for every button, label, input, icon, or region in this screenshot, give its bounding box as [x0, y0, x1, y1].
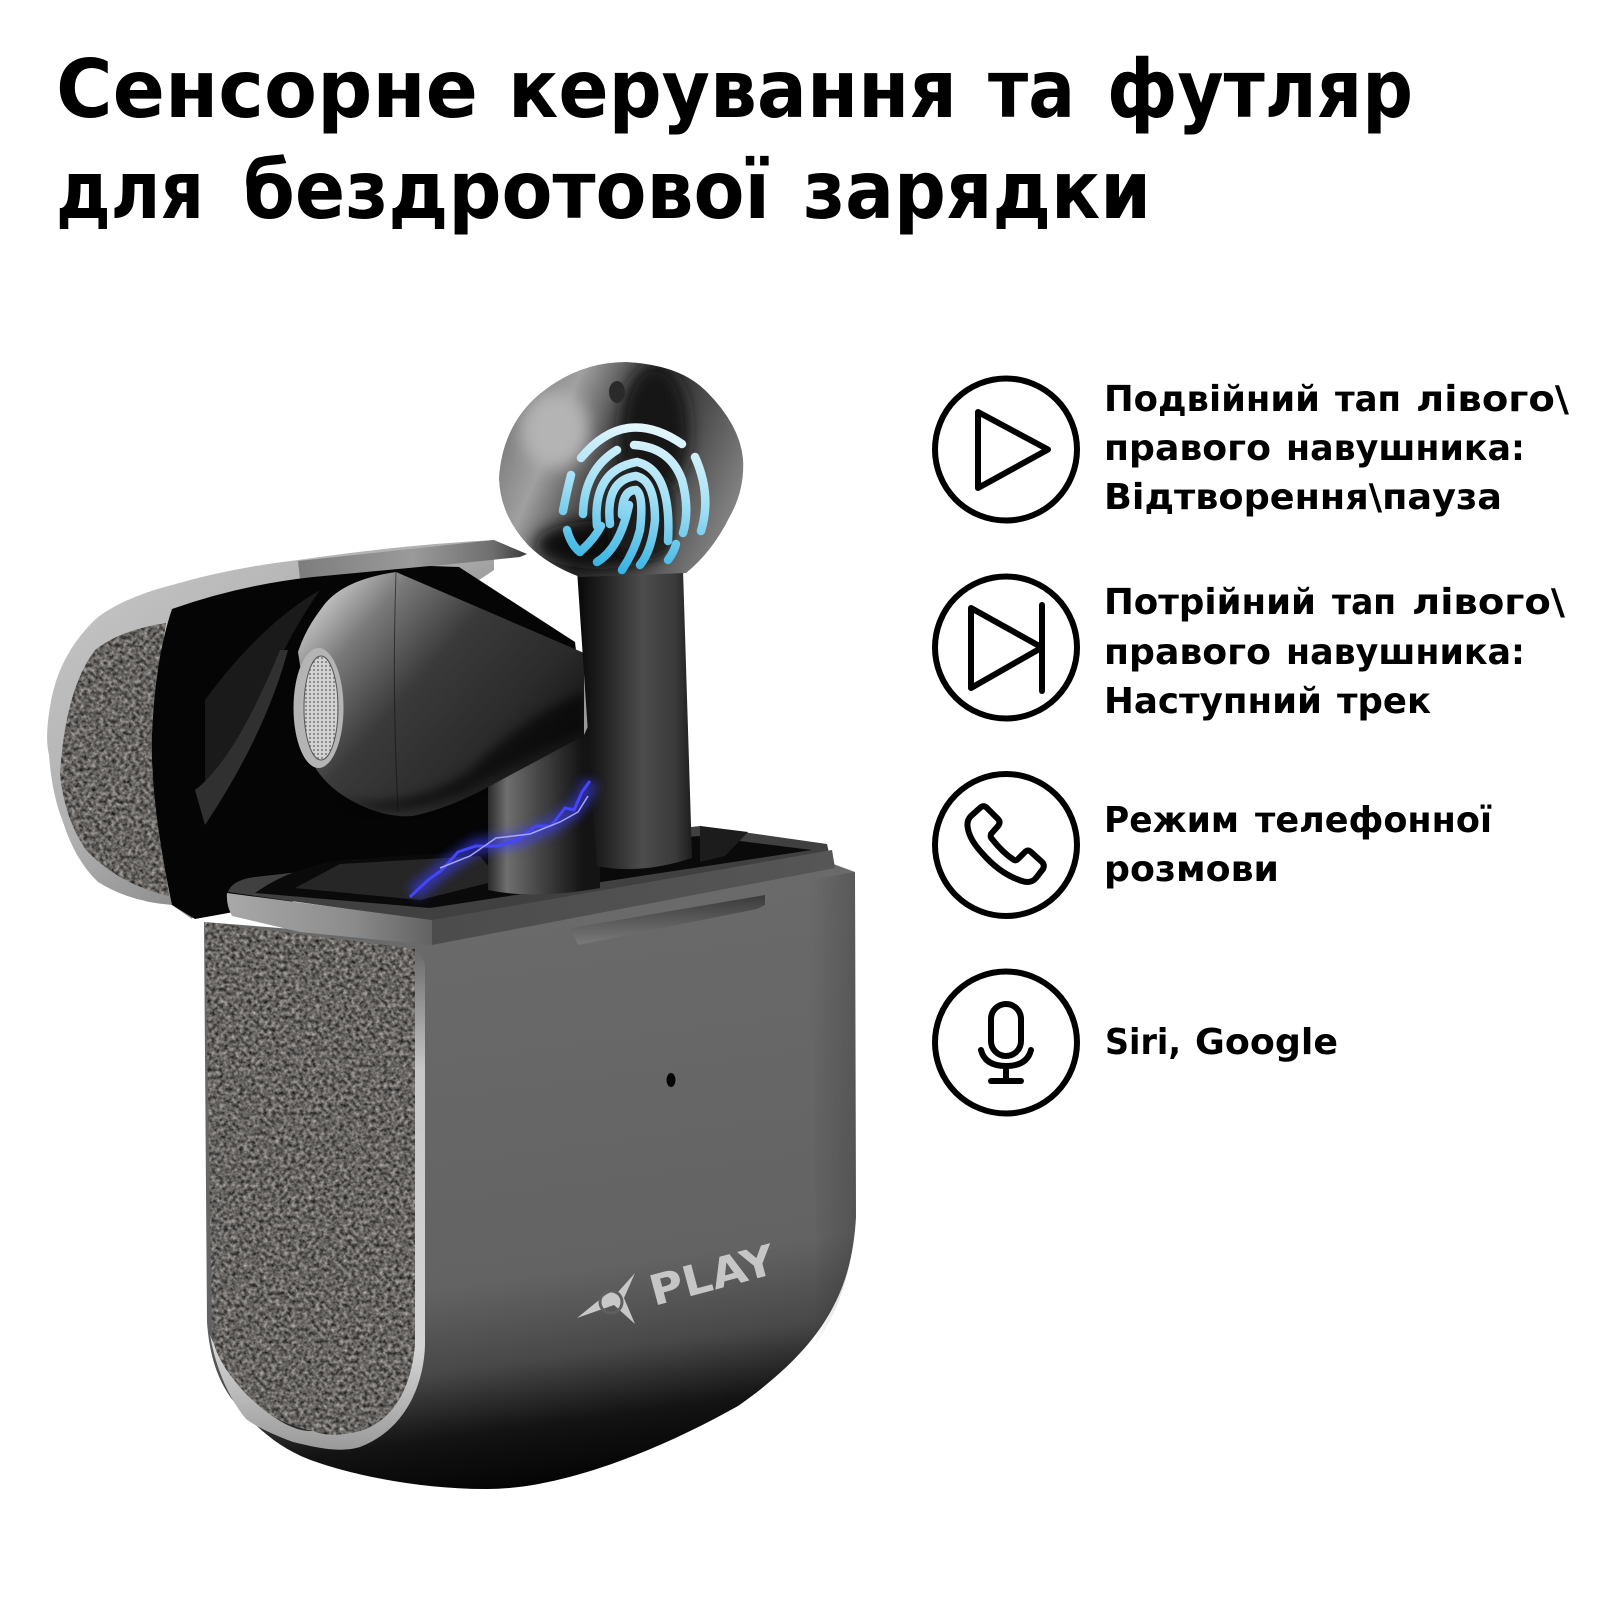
latch: [571, 895, 765, 945]
lid leather: [60, 623, 169, 896]
feature: phone call: [935, 774, 1492, 916]
brand logo: PLAY: [644, 1235, 781, 1316]
mesh speaker: [294, 648, 344, 768]
back earbud: [294, 572, 600, 895]
title: для: [56, 144, 204, 237]
status LED: [666, 1073, 676, 1087]
title: [56, 43, 1413, 237]
title: керування: [508, 43, 957, 136]
feature: next track: [935, 576, 1566, 722]
text: call mode: Режим: [1104, 800, 1239, 841]
product: charging case with earbuds: [47, 360, 856, 1489]
text: triple tap: Потрійний: [1104, 582, 1316, 623]
text: double tap: навушника:: [1286, 428, 1525, 469]
text: Siri, Google: [1105, 1022, 1338, 1063]
case rim: [227, 826, 835, 945]
case body: [200, 862, 856, 1489]
text: triple tap: навушника:: [1286, 632, 1525, 673]
text: triple tap: тап: [1332, 582, 1396, 623]
icon: play: [935, 378, 1077, 520]
text: double tap: правого: [1104, 428, 1271, 469]
front earbud: [495, 360, 745, 869]
text: double tap: [1104, 379, 1570, 518]
charging lightning: [410, 781, 590, 897]
silver trim: [210, 945, 425, 1450]
icon: phone: [935, 774, 1077, 916]
mic port: [609, 381, 625, 403]
title: та: [988, 43, 1075, 136]
icon: next track: [935, 576, 1077, 718]
text: call mode: розмови: [1104, 849, 1279, 890]
stem: [577, 570, 692, 869]
text: call mode: телефонної: [1255, 800, 1492, 841]
text: call mode: [1104, 800, 1492, 890]
text: double tap: тап: [1335, 379, 1401, 420]
text: Siri, Google: Siri,: [1105, 1022, 1181, 1063]
text: triple tap: [1104, 582, 1566, 722]
text: double tap: лівого\: [1416, 379, 1570, 420]
text: double tap: Подвійний: [1104, 379, 1320, 420]
title: бездротової: [243, 144, 770, 237]
leather panel: [200, 915, 420, 1440]
case lid: [47, 540, 600, 919]
feature: play / pause: [935, 378, 1570, 520]
lid interior: [152, 566, 600, 919]
title: футляр: [1107, 43, 1413, 136]
text: Siri, Google: Google: [1195, 1022, 1338, 1063]
text: triple tap: правого: [1104, 632, 1271, 673]
title: зарядки: [803, 144, 1151, 237]
text: triple tap: трек: [1337, 681, 1431, 722]
text: double tap: Відтворення\пауза: [1104, 477, 1502, 518]
title: Сенсорне: [56, 43, 478, 136]
feature: voice assistant: [935, 972, 1338, 1114]
text: triple tap: Наступний: [1104, 681, 1322, 722]
text: triple tap: лівого\: [1412, 582, 1566, 623]
fingerprint: [563, 427, 705, 570]
icon: microphone: [935, 972, 1077, 1114]
head: [495, 360, 745, 580]
brand logo: [577, 1235, 781, 1324]
lid top bar: [298, 540, 527, 580]
